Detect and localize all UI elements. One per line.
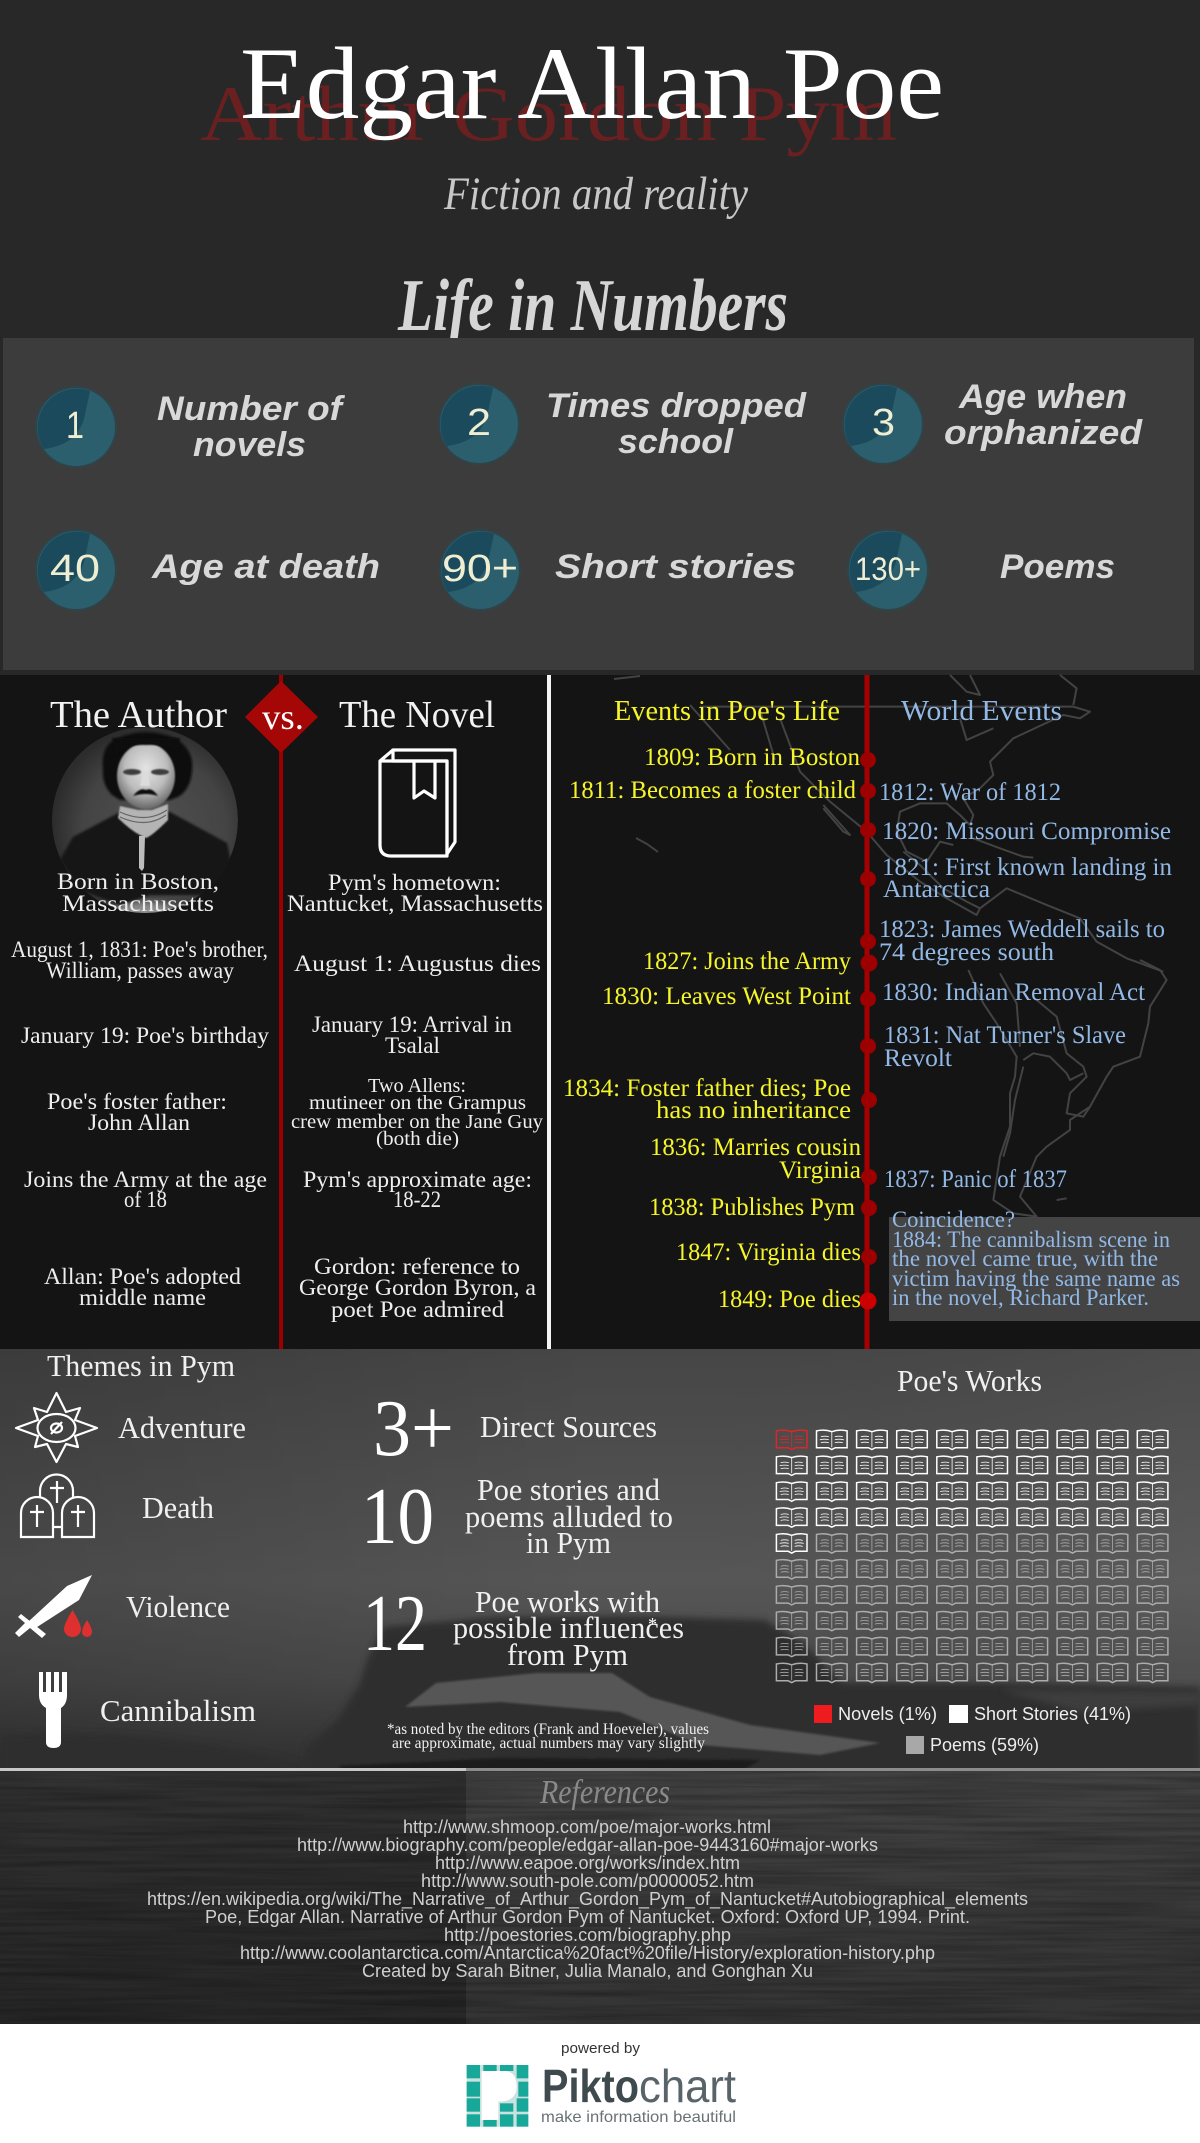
- references list: http://www.coolantarctica.com/Antarctica%20fact%20file/History/exploration-history.php: [240, 1943, 935, 1963]
- timeline: Poe's life events: has no inheritance: [656, 1097, 851, 1124]
- timeline: Poe's life events: 1849: Poe dies: [718, 1286, 861, 1313]
- novel column facts: (both die): [376, 1128, 459, 1150]
- callout background: coincidence: [889, 1217, 1200, 1321]
- logo wordmark: Pikto: [542, 2060, 639, 2112]
- stat: times dropped school: Times dropped: [546, 387, 807, 425]
- timeline: world events: 1823: James Weddell sails to: [879, 916, 1165, 943]
- stat: age when orphanized: 3: [872, 402, 895, 444]
- author column facts: John Allan: [88, 1110, 191, 1135]
- callout: coincidence: Coincidence?: [892, 1207, 1015, 1232]
- references list: Poe, Edgar Allan. Narrative of Arthur Gordon Pym of Nantucket. Oxford: Oxford UP, 1994. Print.: [205, 1907, 970, 1927]
- icon: compass star: [16, 1393, 97, 1462]
- stat: times dropped school: school: [618, 423, 735, 461]
- logo wordmark: chart: [639, 2060, 736, 2112]
- stat: direct sources: [373, 1385, 657, 1473]
- novel column facts: crew member on the Jane Guy: [291, 1111, 543, 1133]
- theme: cannibalism: Cannibalism: [100, 1693, 256, 1728]
- stat: poems: [847, 529, 1115, 611]
- timeline: Poe's life events: 1827: Joins the Army: [643, 948, 851, 975]
- heading: Poe's works: Poe's Works: [897, 1363, 1042, 1398]
- references list: http://www.biography.com/people/edgar-allan-poe-9443160#major-works: [297, 1835, 878, 1855]
- timeline: world events: 74 degrees south: [879, 939, 1055, 966]
- theme: death: [21, 1474, 214, 1537]
- novel column facts: poet Poe admired: [331, 1297, 505, 1322]
- powered by: powered by: [561, 2040, 640, 2057]
- heading: life in numbers: Life in Numbers: [397, 265, 788, 347]
- theme: death: Death: [142, 1490, 214, 1525]
- stat: short stories: Short stories: [555, 548, 796, 586]
- heading: events in Poe's life: Events in Poe's Life: [614, 696, 840, 727]
- novel column facts: August 1: Augustus dies: [294, 951, 541, 976]
- icon: sword with blood: [15, 1575, 92, 1638]
- stat: number of novels: Number of: [157, 390, 346, 428]
- timeline: world events: 1831: Nat Turner's Slave: [884, 1022, 1126, 1049]
- theme: adventure: [16, 1393, 246, 1462]
- stat: works with possible influences: from Pym: [507, 1637, 628, 1672]
- stat: stories and poems alluded to: 10: [361, 1473, 434, 1561]
- stat: direct sources: 3+: [373, 1385, 454, 1473]
- stat: number of novels: 1: [66, 405, 84, 447]
- author column facts: Massachusetts: [62, 891, 214, 916]
- novel column facts: Two Allens:: [368, 1075, 466, 1097]
- novel column facts: [287, 870, 543, 1322]
- author column facts: Poe's foster father:: [47, 1089, 227, 1114]
- timeline: Poe's life events: 1838: Publishes Pym: [649, 1194, 856, 1221]
- timeline: world events: Revolt: [884, 1045, 952, 1072]
- references list: https://en.wikipedia.org/wiki/The_Narrative_of_Arthur_Gordon_Pym_of_Nantucket#Autobiographical_elements: [147, 1889, 1028, 1910]
- stat: stories and poems alluded to: [361, 1472, 673, 1561]
- stat: age when orphanized: orphanized: [944, 414, 1143, 452]
- novel column facts: Tsalal: [385, 1033, 440, 1058]
- author column facts: of 18: [124, 1187, 167, 1212]
- stat: times dropped school: [438, 383, 807, 465]
- footnote: are approximate, actual numbers may vary slightly: [392, 1735, 705, 1752]
- map: the Americas: [614, 675, 1167, 1217]
- timeline: Poe's life events: 1847: Virginia dies: [676, 1239, 861, 1266]
- novel column facts: George Gordon Byron, a: [299, 1275, 536, 1300]
- panel: life in numbers: [3, 338, 1194, 670]
- section divider line: [0, 1768, 1200, 1771]
- stat: age when orphanized: Age when: [958, 378, 1127, 416]
- theme: cannibalism: [39, 1672, 256, 1748]
- references list: [147, 1817, 1028, 1981]
- timeline: world events: 1820: Missouri Compromise: [882, 818, 1171, 845]
- callout: coincidence: in the novel, Richard Parker.: [892, 1285, 1149, 1310]
- stat: stories and poems alluded to: poems alluded to: [465, 1499, 673, 1534]
- stat: age at death: Age at death: [151, 548, 380, 586]
- comparison spine: [279, 675, 283, 1349]
- stat: age when orphanized: [842, 378, 1143, 465]
- theme: violence: [15, 1575, 230, 1638]
- legend: Poems (59%): [930, 1735, 1039, 1755]
- portrait of Poe: [52, 727, 238, 922]
- background: island landscape: [0, 1349, 1200, 1790]
- author column facts: Born in Boston,: [57, 869, 219, 894]
- stat: works with possible influences: Poe works with: [475, 1584, 660, 1619]
- references list: http://www.eapoe.org/works/index.htm: [435, 1853, 740, 1873]
- stat: stories and poems alluded to: in Pym: [526, 1525, 611, 1560]
- references list: Created by Sarah Bitner, Julia Manalo, and Gonghan Xu: [362, 1961, 813, 1981]
- references list: http://www.shmoop.com/poe/major-works.html: [403, 1817, 771, 1837]
- logo wordmark: make information beautiful: [541, 2109, 736, 2126]
- heading: themes in Pym: Themes in Pym: [47, 1348, 235, 1383]
- heading: world events: World Events: [901, 696, 1062, 727]
- timeline: Poe's life events: 1809: Born in Boston: [644, 744, 860, 771]
- stat: number of novels: [35, 386, 346, 468]
- timeline: world events: Antarctica: [883, 876, 990, 903]
- stat: stories and poems alluded to: Poe stories and: [477, 1472, 660, 1507]
- novel column facts: Nantucket, Massachusetts: [287, 891, 543, 916]
- logo mark: [467, 2065, 528, 2127]
- column divider: [547, 675, 551, 1349]
- heading: references: References: [539, 1774, 670, 1811]
- author column facts: William, passes away: [46, 958, 234, 983]
- timeline: Poe's life events: [563, 744, 861, 1313]
- footer: [0, 2024, 1200, 2143]
- novel column facts: January 19: Arrival in: [312, 1012, 512, 1037]
- novel column facts: Gordon: reference to: [314, 1254, 520, 1279]
- legend: Novels (1%): [838, 1704, 937, 1724]
- author column facts: Joins the Army at the age: [24, 1167, 267, 1192]
- stat: times dropped school: 2: [467, 402, 491, 444]
- icon: book: [380, 750, 455, 856]
- footnote: [387, 1721, 709, 1752]
- vs diamond: [245, 681, 318, 753]
- novel column facts: Pym's hometown:: [328, 870, 501, 895]
- legend: Short Stories (41%): [974, 1704, 1131, 1724]
- title: Edgar Allan Poe: [240, 27, 944, 141]
- callout: coincidence: the novel came true, with the: [892, 1246, 1158, 1271]
- chart: Poe's works icon array: [776, 1430, 1168, 1683]
- stat: works with possible influences: [363, 1580, 684, 1672]
- panel: author vs novel and timeline background: [0, 675, 1200, 1349]
- timeline: Poe's life events: 1811: Becomes a foster child: [569, 777, 856, 804]
- subtitle behind title: Arthur Gordon Pym: Arthur Gordon Pym: [200, 70, 897, 157]
- stat: works with possible influences: *: [648, 1614, 657, 1634]
- stat: short stories: [439, 529, 796, 611]
- timeline: Poe's life events: 1834: Foster father dies; Poe: [563, 1075, 851, 1102]
- theme: adventure: Adventure: [118, 1410, 246, 1445]
- legend: [814, 1704, 1131, 1755]
- stat: works with possible influences: 12: [363, 1580, 427, 1668]
- timeline: Poe's life events: 1830: Leaves West Point: [602, 983, 851, 1010]
- timeline axis and markers: [860, 675, 878, 1349]
- timeline: world events: 1812: War of 1812: [879, 779, 1061, 806]
- timeline: Poe's life events: Virginia: [779, 1157, 861, 1184]
- stat: poems: Poems: [1000, 548, 1115, 586]
- vs diamond: vs.: [262, 697, 304, 737]
- novel column facts: 18-22: [393, 1187, 441, 1212]
- stat: number of novels: novels: [193, 426, 306, 464]
- author column facts: [11, 869, 269, 1310]
- author column facts: January 19: Poe's birthday: [21, 1023, 269, 1048]
- author column facts: August 1, 1831: Poe's brother,: [11, 937, 268, 962]
- stat: short stories: 90+: [442, 548, 518, 590]
- heading: the author: The Author: [50, 694, 227, 736]
- timeline: world events: 1821: First known landing in: [882, 854, 1172, 881]
- timeline: world events: 1837: Panic of 1837: [884, 1166, 1067, 1193]
- callout: coincidence: [892, 1207, 1180, 1310]
- timeline: Poe's life events: 1836: Marries cousin: [650, 1134, 861, 1161]
- stat: age at death: [35, 529, 380, 611]
- background: sea: [0, 1770, 1200, 2024]
- callout: coincidence: 1884: The cannibalism scene in: [892, 1227, 1170, 1252]
- novel column facts: Pym's approximate age:: [303, 1167, 532, 1192]
- references list: http://www.south-pole.com/p0000052.htm: [421, 1871, 754, 1891]
- stat: works with possible influences: possible influences: [453, 1610, 684, 1645]
- stat: age at death: 40: [50, 548, 100, 590]
- heading: the novel: The Novel: [339, 694, 495, 736]
- timeline: world events: 1830: Indian Removal Act: [882, 979, 1145, 1006]
- author column facts: Allan: Poe's adopted: [44, 1264, 242, 1289]
- footnote: *as noted by the editors (Frank and Hoeveler), values: [387, 1721, 709, 1738]
- author column facts: middle name: [79, 1285, 206, 1310]
- tagline: Fiction and reality: [443, 168, 748, 220]
- icon: tombstones: [21, 1474, 94, 1537]
- stat: direct sources: Direct Sources: [480, 1409, 657, 1444]
- novel column facts: mutineer on the Grampus: [309, 1092, 526, 1114]
- stat: poems: 130+: [855, 551, 921, 587]
- timeline: world events: [879, 779, 1172, 1193]
- logo wordmark: [541, 2060, 736, 2126]
- references list: http://poestories.com/biography.php: [444, 1925, 731, 1945]
- icon: fork: [39, 1672, 67, 1748]
- callout: coincidence: victim having the same name as: [892, 1266, 1180, 1291]
- theme: violence: Violence: [126, 1589, 230, 1624]
